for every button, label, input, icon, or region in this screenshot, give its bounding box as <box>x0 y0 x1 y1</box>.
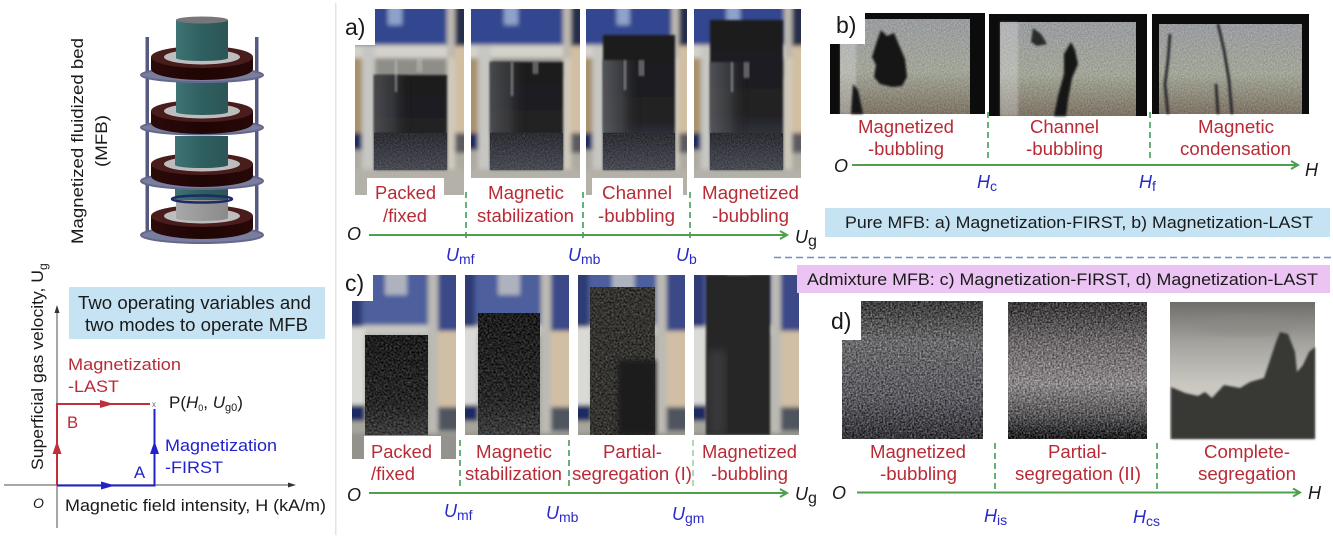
apparatus label: Magnetized fluidized bed <box>68 38 87 244</box>
axis b: f <box>1152 178 1156 194</box>
axis b: H <box>977 172 990 192</box>
axis d: H <box>984 506 997 526</box>
label: operating point: , <box>203 393 213 412</box>
x-axis title: Magnetic field intensity, H (kA/m) <box>65 496 326 515</box>
axis b: H <box>1305 160 1319 180</box>
regime labels d <box>870 441 1296 484</box>
regime labels b: Magnetic <box>1198 116 1274 137</box>
axis d: is <box>997 512 1007 528</box>
regime labels c: stabilization <box>465 463 562 484</box>
photo: magnetized bubbling admixture <box>694 275 799 435</box>
arrow: magnetization-last path <box>52 400 150 485</box>
label: operating point: P(H <box>169 393 198 412</box>
axis c: U <box>444 501 457 521</box>
axis a: U <box>446 245 459 265</box>
photo: packed bed <box>355 9 464 195</box>
label: magnetization-last: Magnetization <box>68 355 181 374</box>
vertical panel divider <box>335 3 336 535</box>
axis b: O <box>834 156 848 176</box>
label: operating point: ) <box>237 393 243 412</box>
label: operating point <box>152 393 243 414</box>
axis c: U <box>546 503 559 523</box>
label: c) <box>338 268 373 301</box>
regime labels c: /fixed <box>371 463 415 484</box>
label: magnetization-last: B <box>67 413 78 432</box>
chart axes <box>4 305 296 528</box>
axis d: O <box>832 483 846 503</box>
photo: partial segregation <box>578 275 685 435</box>
regime labels a: Packed <box>375 182 436 203</box>
regime labels c: Packed <box>371 441 432 462</box>
regime labels d: segregation <box>1198 463 1296 484</box>
axis c: mb <box>559 509 579 525</box>
axis a <box>347 192 817 267</box>
x-axis title: O <box>33 495 44 511</box>
axis d: H <box>1308 483 1322 503</box>
label: magnetization-first: Magnetization <box>165 436 277 455</box>
arrow: magnetization-first path <box>57 409 159 490</box>
apparatus label <box>68 38 111 244</box>
panel a: photos and pure MFB magnetization-first regimes <box>338 0 817 267</box>
label: magnetization-last <box>67 355 181 432</box>
regime labels a: -bubbling <box>712 205 789 226</box>
panel: operating modes chart <box>4 263 326 528</box>
label: b) <box>830 12 865 44</box>
axis a: U <box>795 227 808 247</box>
axis a: b <box>689 251 697 267</box>
regime labels a: Magnetic <box>488 182 564 203</box>
regime labels d: segregation (II) <box>1015 463 1141 484</box>
label: c): c) <box>345 270 364 296</box>
callout: admixture MFB <box>797 265 1330 293</box>
axis b: H <box>1139 172 1152 192</box>
label: magnetization-first: A <box>134 463 146 482</box>
photo: magnetized bubbling <box>694 9 801 178</box>
panel: apparatus <box>68 16 263 244</box>
axis a: mb <box>581 251 601 267</box>
regime labels d: Partial- <box>1048 441 1107 462</box>
regime labels d: Complete- <box>1204 441 1290 462</box>
axis c: gm <box>685 510 704 526</box>
regime labels a: stabilization <box>477 205 574 226</box>
regime labels c: -bubbling <box>711 463 788 484</box>
photo: partial segregation <box>1008 302 1147 439</box>
callout: pure MFB <box>825 208 1330 237</box>
regime labels d: -bubbling <box>880 463 957 484</box>
axis b <box>834 112 1319 194</box>
axis d <box>832 443 1322 529</box>
axis a: mf <box>459 251 475 267</box>
regime labels c: Magnetized <box>702 441 797 462</box>
y-axis title: Superficial gas velocity, U <box>28 270 47 470</box>
label: b): b) <box>836 12 856 38</box>
label: operating point: 0 <box>198 403 203 413</box>
axis a: U <box>568 245 581 265</box>
axis a: g <box>808 233 817 250</box>
regime labels b: condensation <box>1180 138 1291 159</box>
axis d: H <box>1133 507 1146 527</box>
axis c: U <box>672 504 685 524</box>
label: a): a) <box>345 14 365 40</box>
regime labels a: Channel <box>602 182 672 203</box>
callout: two operating variables: Two operating variables and <box>78 293 311 313</box>
panel d: photos and admixture MFB magnetization-last regimes <box>830 301 1322 529</box>
label: magnetization-last: -LAST <box>68 377 119 396</box>
label: operating point: x <box>152 400 156 409</box>
axis b: c <box>990 178 997 194</box>
panel c: photos and admixture MFB magnetization-first regimes <box>338 265 817 526</box>
photo: channel bubbling <box>586 9 687 195</box>
axis c: U <box>795 484 808 504</box>
regime labels a <box>356 178 799 226</box>
photo: complete segregation <box>1170 302 1315 439</box>
regime labels c: Partial- <box>603 441 662 462</box>
regime labels b <box>858 116 1291 159</box>
photo: magnetized bubbling <box>830 13 985 114</box>
label: magnetization-first <box>134 436 277 482</box>
label: d): d) <box>831 308 851 334</box>
axis a: U <box>676 245 689 265</box>
axis c <box>347 440 817 526</box>
regime labels b: -bubbling <box>1026 138 1103 159</box>
regime labels b: Magnetized <box>858 116 954 137</box>
label: operating point: g0 <box>225 402 237 414</box>
regime labels a: Magnetized <box>702 182 799 203</box>
regime labels c: segregation (I) <box>572 463 692 484</box>
axis c: g <box>808 490 817 507</box>
icon: magnetized fluidized bed column <box>141 16 263 243</box>
photo: magnetic condensation <box>1152 14 1309 114</box>
regime labels b: Channel <box>1030 116 1099 137</box>
label: a) <box>338 0 375 45</box>
label: operating point: U <box>213 393 226 412</box>
axis c: O <box>347 485 361 505</box>
photo: channel bubbling <box>989 14 1147 116</box>
axis d: cs <box>1146 513 1160 529</box>
regime labels d: Magnetized <box>870 441 966 462</box>
photo: packed admixture <box>352 275 456 459</box>
regime labels a: /fixed <box>383 205 427 226</box>
callout: two operating variables <box>69 287 325 339</box>
panel b: photos and pure MFB magnetization-last regimes <box>830 12 1319 194</box>
label: d) <box>830 301 861 340</box>
axis a: O <box>347 224 361 244</box>
regime labels c <box>354 436 799 485</box>
regime labels a: -bubbling <box>598 205 675 226</box>
y-axis title: g <box>36 263 50 270</box>
regime labels c: Magnetic <box>476 441 552 462</box>
callout: two operating variables: two modes to operate MFB <box>85 315 308 335</box>
callout: admixture MFB: Admixture MFB: c) Magnetization-FIRST, d) Magnetization-LAST <box>807 271 1318 289</box>
axis c: mf <box>457 507 473 523</box>
apparatus label: (MFB) <box>92 115 111 167</box>
photo: magnetic stabilization <box>471 9 580 178</box>
callout: pure MFB: Pure MFB: a) Magnetization-FIRST, b) Magnetization-LAST <box>845 214 1313 232</box>
label: magnetization-first: -FIRST <box>165 458 223 477</box>
photo: magnetized bubbling admixture <box>842 301 983 439</box>
photo: stabilized admixture <box>465 275 569 435</box>
regime labels b: -bubbling <box>868 138 944 159</box>
